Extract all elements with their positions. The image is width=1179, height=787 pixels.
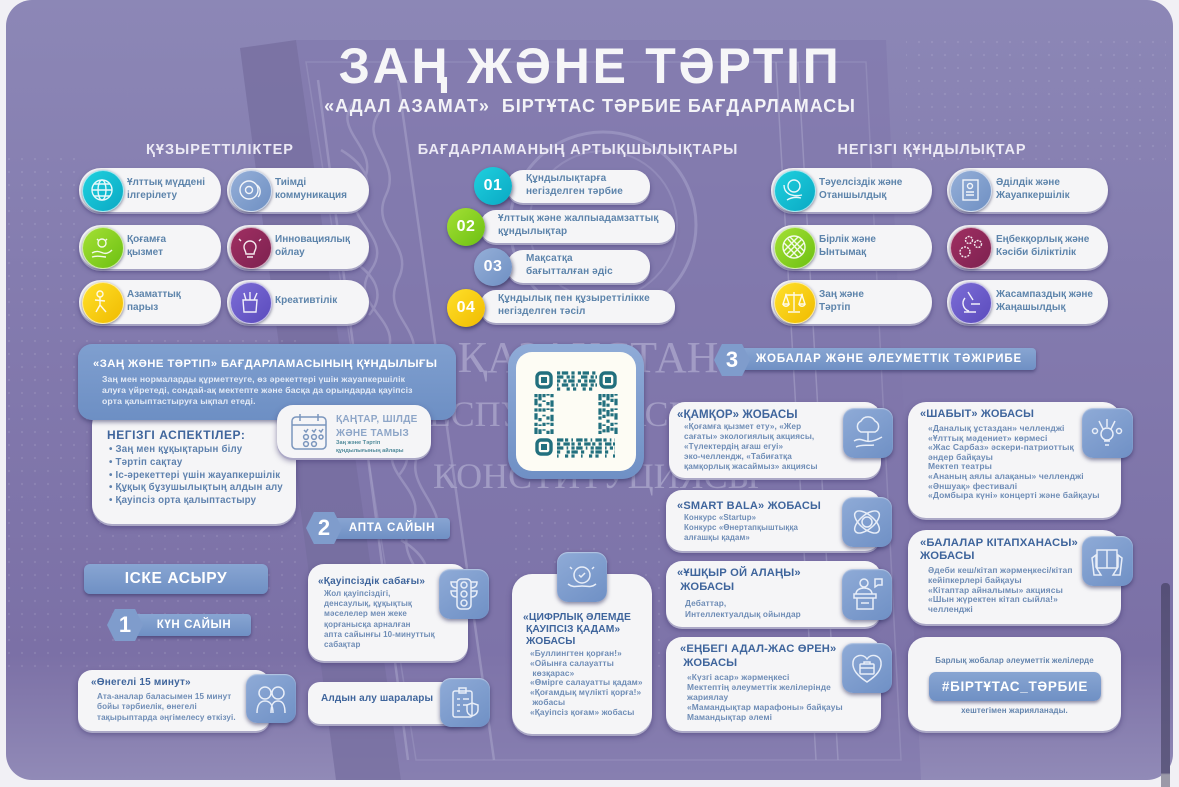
- advantage 02: Ұлттық және жалпыадамзаттық: [498, 213, 658, 224]
- icon: tree in hand: [843, 408, 893, 458]
- panel: programme value: [78, 344, 456, 420]
- value: labour: Еңбекқорлық және: [996, 234, 1089, 245]
- card text: «Қоғамға қызмет ету», «Жер: [684, 422, 801, 431]
- icon: calendar: [291, 414, 327, 450]
- value: law and order: Заң және: [819, 289, 864, 300]
- competency: national interest: ілгерілету: [127, 190, 177, 200]
- card text: бойы тәрбиелік, өнегелі: [97, 702, 197, 711]
- date heading: [336, 414, 418, 438]
- value: justice: Әділдік және: [996, 177, 1060, 188]
- card heading: «ЦИФРЛЫҚ ӘЛЕМДЕ: [523, 612, 631, 623]
- competency: communication: коммуникация: [275, 190, 347, 200]
- badge: projects and social practice: ЖОБАЛАР ЖӘНЕ ӘЛЕУМЕТТІК ТӘЖІРИБЕ: [756, 353, 1022, 365]
- advantage 01: [472, 166, 652, 209]
- card text: [684, 422, 818, 471]
- date caption: [336, 440, 404, 454]
- card heading: ҚАУІПСІЗ ҚАДАМ»: [526, 624, 620, 635]
- card: Qamqor project: [669, 402, 881, 478]
- hashtag pill: [929, 672, 1101, 701]
- card text: «Түлектердің ағаш егуі»: [684, 442, 783, 451]
- icon: podium: [842, 569, 892, 620]
- value: independence: Отаншылдық: [819, 190, 886, 200]
- card text: «Ананың аялы алақаны» челленджі: [928, 471, 1084, 481]
- background panel with book: КОНСТИТУЦИЯСЫ: [433, 456, 759, 496]
- card text: [687, 672, 843, 722]
- card text: «Мамандықтар марафоны» байқауы: [687, 702, 843, 712]
- panel: aspects card: [92, 405, 296, 524]
- card text: [928, 423, 1100, 500]
- card heading: Алдын алу шаралары: [321, 693, 433, 704]
- card heading: «ҚАМҚОР» ЖОБАСЫ: [677, 409, 798, 421]
- card heading: «ШАБЫТ» ЖОБАСЫ: [920, 408, 1034, 420]
- date caption: құндылығының айлары: [336, 448, 404, 454]
- competency: communication: Тиімді: [275, 177, 306, 188]
- card text: денсаулық, құқықтық: [324, 599, 412, 608]
- card heading: [680, 643, 836, 668]
- competency: national interest: Ұлттық мүддені: [127, 177, 205, 188]
- background panel with book: ҚАЗАҚСТАН: [458, 333, 718, 382]
- card text: алғашқы қадам»: [684, 533, 750, 542]
- badge: daily: [107, 609, 252, 641]
- implementation banner: ІСКЕ АСЫРУ: [125, 570, 227, 587]
- advantage 01: негізделген тәрбие: [526, 186, 623, 196]
- advantage 03: бағытталған әдіс: [526, 266, 613, 276]
- advantage 03: [472, 248, 652, 290]
- card text: «Жас Сарбаз» әскери-патриоттық: [928, 442, 1074, 452]
- card text: «Ұлттық мәдениет» көрмесі: [928, 433, 1047, 443]
- value: creativity and novelty: Жаңашылдық: [996, 302, 1065, 312]
- card text: Мектептің әлеуметтік желілерінде: [687, 682, 831, 692]
- hashtag pill: #БІРТҰТАС_ТӘРБИЕ: [942, 679, 1088, 694]
- badge: daily: 1: [119, 612, 131, 637]
- card heading: ЖОБАСЫ: [920, 550, 975, 562]
- advantage 02: құндылықтар: [498, 226, 567, 236]
- icon: traffic light: [439, 569, 489, 619]
- panel: core values: [769, 168, 1110, 330]
- card text: «Қауіпсіз қоғам» жобасы: [530, 707, 634, 717]
- card: safety lesson: [308, 564, 468, 661]
- title: ЗАҢ ЖӘНЕ ТӘРТІП: [339, 38, 841, 94]
- card text: «Буллингтен қорған!»: [530, 648, 622, 658]
- icon: checklist: [440, 678, 490, 727]
- card: example 15 minutes: [78, 670, 270, 731]
- card text: жариялау: [687, 692, 728, 702]
- card text: [685, 598, 801, 618]
- card text: жобасы: [532, 697, 565, 707]
- heading: competencies: ҚҰЗЫРЕТТІЛІКТЕР: [146, 142, 294, 158]
- card text: «Даналық ұстаздан» челленджі: [928, 423, 1064, 433]
- programme value text: орта қалыптастыруға ықпал етеді.: [102, 396, 256, 406]
- competency: innovative thinking: [227, 225, 369, 269]
- card text: тақырыптарда әңгімелесу өткізуі.: [97, 713, 236, 722]
- badge: weekly: АПТА САЙЫН: [349, 522, 435, 534]
- programme value text: [102, 374, 413, 406]
- card: bright mind platform project: [666, 561, 881, 627]
- card text: көзқарас»: [532, 668, 574, 678]
- card: hashtag: [908, 637, 1121, 731]
- aspects list: • Құқық бұзушылықтың алдын алу: [109, 482, 283, 493]
- advantage 02: [446, 208, 678, 250]
- icon: digital safety: [557, 552, 607, 602]
- competency: creativity: [227, 280, 369, 324]
- aspects list: • Тәртіп сақтау: [109, 457, 182, 468]
- heading: advantages: БАҒДАРЛАМАНЫҢ АРТЫҚШЫЛЫҚТАРЫ: [418, 142, 738, 158]
- value: creativity and novelty: [947, 280, 1108, 324]
- card: honest labour project: [666, 637, 881, 731]
- card: Smart Bala project: [666, 490, 881, 551]
- card heading: «БАЛАЛАР КІТАПХАНАСЫ»: [920, 537, 1078, 549]
- date heading: ЖӘНЕ ТАМЫЗ: [336, 428, 409, 438]
- icon: open book in hands: [1082, 536, 1133, 586]
- card text: апта сайынғы 10-минуттық: [324, 630, 435, 639]
- competency: civic duty: Азаматтық: [127, 289, 181, 300]
- card text: «Кітаптар айналымы» акциясы: [928, 585, 1063, 595]
- panel: advantages: [446, 166, 678, 331]
- card heading: ЖОБАСЫ: [680, 580, 734, 592]
- competency: national interest: [79, 168, 221, 212]
- hashtag top text: Барлық жобалар әлеуметтік желілерде: [935, 656, 1094, 665]
- competency: innovative thinking: Инновациялық: [275, 234, 350, 245]
- card text: Конкурс «Startup»: [684, 513, 756, 522]
- card: digital safety project: [512, 574, 652, 734]
- card text: «Өмірге салауатты қадам»: [530, 677, 643, 687]
- advantage 04: [446, 288, 677, 331]
- aspects list: • Заң мен құқықтарын білу: [109, 444, 242, 455]
- card text: «Күзгі асар» жәрмеңкесі: [687, 672, 789, 682]
- card text: сабақтар: [324, 640, 360, 649]
- card heading: ЖОБАСЫ: [526, 636, 575, 647]
- card text: Мамандықтар әлемі: [687, 712, 772, 722]
- advantage 03: 03: [484, 258, 502, 275]
- date heading: ҚАҢТАР, ШІЛДЕ: [336, 414, 418, 425]
- card heading: «Өнегелі 15 минут»: [91, 677, 191, 688]
- background panel with book: РЕСПУБЛИКАСЫНЫҢ: [409, 394, 783, 434]
- value: law and order: Тәртіп: [819, 302, 850, 312]
- implementation banner: [84, 564, 268, 594]
- advantage 04: 04: [457, 299, 475, 316]
- badge: daily: КҮН САЙЫН: [157, 619, 231, 631]
- icon: atom: [842, 497, 892, 547]
- card text: Дебаттар,: [685, 598, 726, 608]
- aspects list: • Іс-әрекеттері үшін жауапкершілік: [109, 470, 280, 481]
- card heading: «Қауіпсіздік сабағы»: [318, 576, 425, 587]
- badge: weekly: [306, 512, 452, 544]
- competency: civic duty: [79, 280, 221, 324]
- value: labour: Кәсіби біліктілік: [996, 246, 1076, 258]
- advantage 04: Құндылық пен құзыреттілікке: [498, 293, 650, 304]
- card text: қорғанысқа арналған: [324, 620, 411, 629]
- value: labour: [947, 225, 1108, 269]
- badge: weekly: 2: [318, 515, 330, 540]
- icon: lightbulb stars: [1082, 408, 1133, 458]
- value: unity: Бірлік және: [819, 234, 876, 245]
- card text: «Шын жүректен кітап сыйла!»: [928, 594, 1058, 604]
- advantage 02: 02: [457, 218, 475, 235]
- card text: [928, 565, 1073, 614]
- card text: Жол қауіпсіздігі,: [324, 589, 391, 598]
- card text: қамқорлық жасаймыз» акциясы: [684, 462, 818, 471]
- card text: Ата-аналар баласымен 15 минут: [97, 692, 231, 701]
- advantage 04: негізделген тәсіл: [498, 306, 586, 316]
- card text: әндер байқауы: [928, 452, 993, 462]
- scrollbar: [1161, 583, 1170, 787]
- card text: Конкурс «Өнертапқыштыққа: [684, 523, 798, 532]
- card text: «Әншуақ» фестивалі: [928, 481, 1017, 491]
- card text: «Ойынға салауатты: [530, 658, 614, 668]
- value: independence: [771, 168, 932, 212]
- competency: creativity: Креативтілік: [275, 295, 337, 306]
- card text: кейіпкерлері байқауы: [928, 575, 1022, 585]
- aspects heading: НЕГІЗГІ АСПЕКТІЛЕР:: [107, 428, 245, 442]
- card heading: «ЕҢБЕГІ АДАЛ-ЖАС ӨРЕН»: [680, 643, 836, 655]
- advantage 01: 01: [484, 177, 502, 194]
- programme value heading: «ЗАҢ ЖӘНЕ ТӘРТІП» БАҒДАРЛАМАСЫНЫҢ ҚҰНДЫЛЫҒЫ: [93, 358, 437, 370]
- date card: [277, 405, 431, 458]
- card text: Мектеп театры: [928, 461, 992, 471]
- card text: «Домбыра күні» концерті және байқауы: [928, 490, 1100, 500]
- card: children's library project: [908, 530, 1121, 624]
- card text: Интеллектуалдық ойындар: [685, 608, 801, 618]
- advantage 01: Құндылықтарға: [526, 173, 606, 184]
- programme value text: Заң мен нормаларды құрметтеуге, өз әрекеттері үшін жауапкершілік: [102, 374, 405, 384]
- value: independence: Тәуелсіздік және: [819, 177, 902, 188]
- card heading: [523, 612, 631, 647]
- competency: public service: қызмет: [127, 246, 163, 258]
- value: justice: Жауапкершілік: [996, 190, 1070, 200]
- badge: projects and social practice: [714, 344, 1038, 376]
- card heading: «SMART BALA» ЖОБАСЫ: [677, 500, 821, 512]
- subtitle: «АДАЛ АЗАМАТ» БІРТҰТАС ТӘРБИЕ БАҒДАРЛАМАСЫ: [324, 96, 856, 116]
- value: justice: [947, 168, 1108, 212]
- value: unity: [771, 225, 932, 269]
- card text: сағаты» экологиялық акциясы,: [684, 432, 814, 441]
- value: unity: Ынтымақ: [819, 246, 866, 258]
- card text: мәселелер мен жеке: [324, 609, 407, 618]
- card text: [530, 648, 643, 717]
- card text: Әдеби кеш/кітап жәрмеңкесі/кітап: [928, 565, 1073, 575]
- value: law and order: [771, 280, 932, 324]
- programme value text: алуға үйретеді, сондай-ақ мектепте және басқа да орындарда қауіпсіз: [102, 385, 413, 395]
- hashtag bottom text: хештегімен жарияланады.: [961, 706, 1068, 715]
- QR code: [508, 344, 644, 479]
- card: prevention measures: [308, 682, 468, 724]
- card heading: [920, 537, 1078, 562]
- heading: core values: НЕГІЗГІ ҚҰНДЫЛЫҚТАР: [837, 142, 1027, 158]
- card heading: [677, 566, 801, 592]
- panel: competencies: [77, 168, 372, 330]
- advantage 03: Мақсатқа: [526, 253, 573, 264]
- card text: [324, 589, 435, 649]
- card: inspiration project: [908, 402, 1121, 518]
- card heading: «ҰШҚЫР ОЙ АЛАҢЫ»: [677, 567, 801, 579]
- card text: «Қоғамдық мүлікті қорға!»: [530, 687, 641, 697]
- aspects list: [109, 444, 283, 506]
- card text: [684, 513, 798, 542]
- competency: public service: Қоғамға: [127, 234, 166, 245]
- competency: innovative thinking: ойлау: [275, 246, 305, 258]
- card text: челленджі: [928, 604, 973, 614]
- icon: parents: [246, 674, 296, 723]
- card text: эко-челлендж, «Табиғатқа: [684, 452, 792, 461]
- value: creativity and novelty: Жасампаздық және: [996, 289, 1093, 300]
- competency: communication: [227, 168, 369, 212]
- badge: projects and social practice: 3: [726, 347, 738, 372]
- aspects list: • Қауіпсіз орта қалыптастыру: [109, 495, 256, 506]
- card heading: ЖОБАСЫ: [683, 656, 737, 668]
- competency: civic duty: парыз: [127, 302, 158, 312]
- competency: public service: [79, 225, 221, 269]
- icon: heart with case: [842, 643, 892, 693]
- card text: [97, 692, 236, 722]
- date caption: Заң және Тәртіп: [336, 440, 380, 446]
